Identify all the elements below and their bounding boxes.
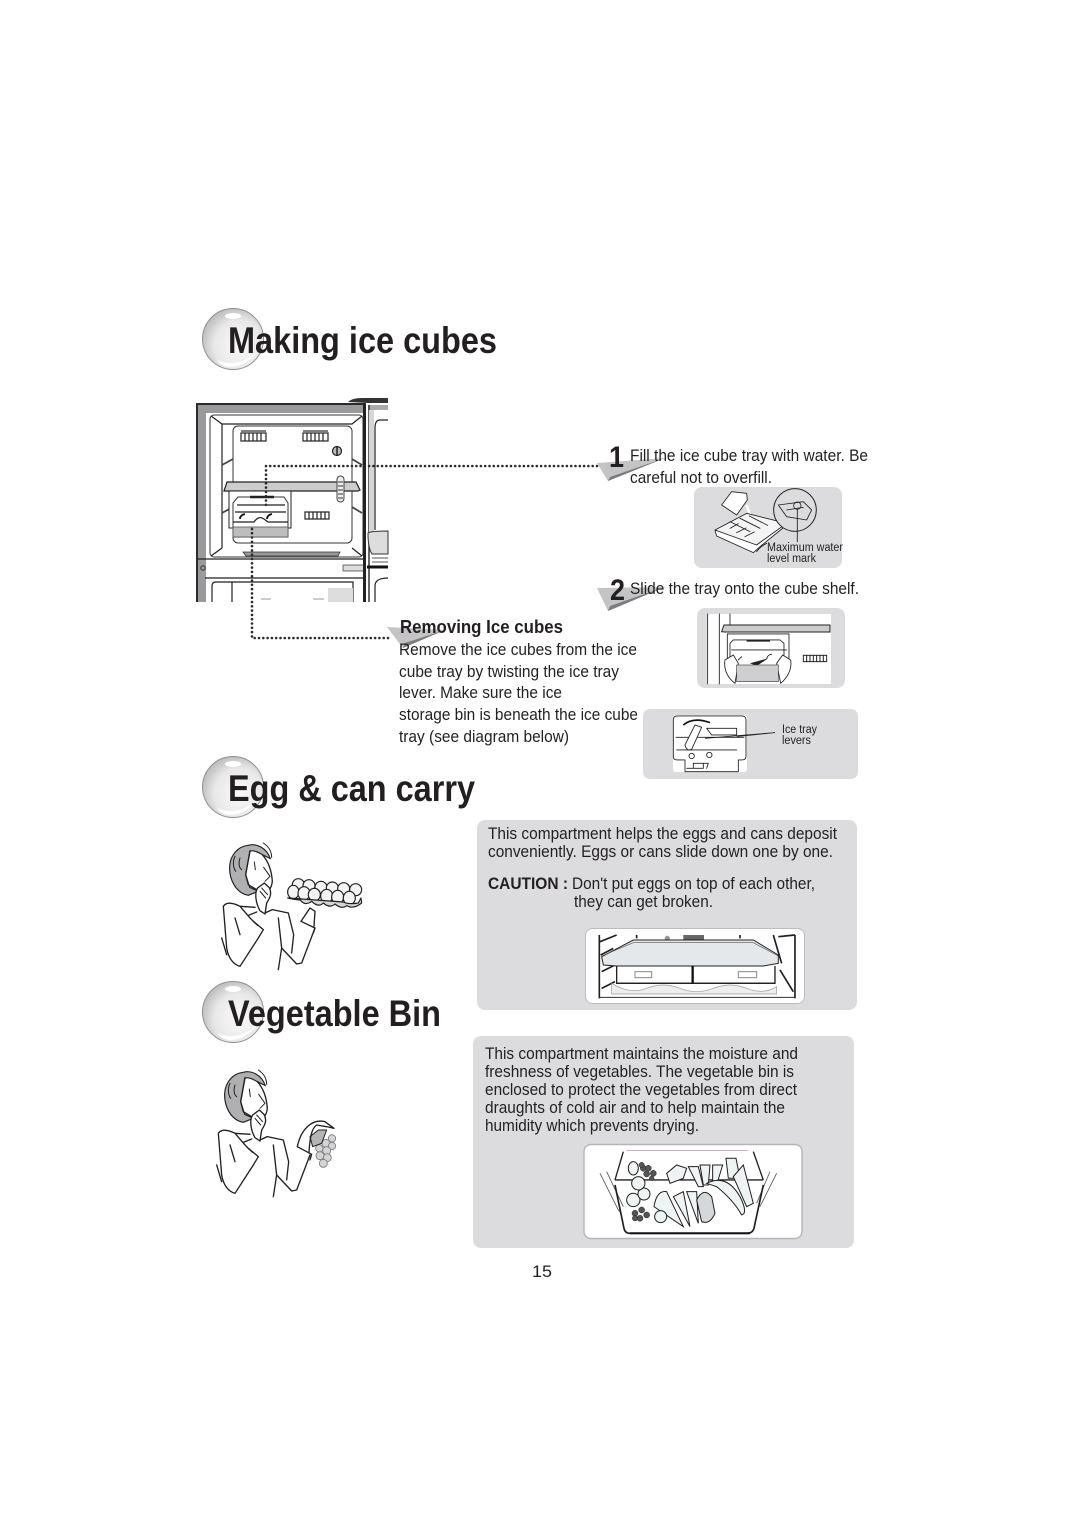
text: caution: [488, 874, 815, 911]
text: caution: Don't put eggs on top of each other,: [572, 874, 815, 893]
title: Vegetable Bin: Vegetable Bin: [228, 993, 441, 1034]
diagram: refrigerator freezer interior: [197, 398, 388, 602]
text: description: This compartment maintains the moisture and: [485, 1044, 798, 1063]
label: maximum water level mark: Maximum water: [767, 542, 843, 554]
panel: egg and can carry: [477, 820, 857, 1010]
title: Egg & can carry: [202, 756, 475, 818]
fridge door: [348, 398, 388, 602]
text: caution: CAUTION :: [488, 874, 568, 893]
marker: step 2: [597, 574, 665, 611]
marker: step 2: 2: [610, 574, 625, 607]
title: Vegetable Bin: [202, 982, 441, 1042]
arrow: dotted leader to step 1: [266, 466, 597, 506]
text: removing instructions: lever. Make sure the ice: [399, 683, 562, 702]
step 1 text: Fill the ice cube tray with water. Be: [630, 446, 868, 465]
illustration: woman holding egg tray: [222, 843, 362, 970]
text: removing instructions: tray (see diagram below): [399, 727, 569, 746]
text: description: draughts of cold air and to help maintain the: [485, 1098, 785, 1117]
marker: removing ice cubes: [387, 627, 445, 648]
text: removing instructions: [399, 640, 638, 746]
marker: step 1: [597, 441, 665, 481]
panel: vegetable bin: [473, 1036, 854, 1248]
label: ice tray levers: Ice tray: [782, 724, 817, 736]
text: description: [485, 1044, 798, 1135]
text: caution: they can get broken.: [574, 892, 713, 911]
text: description: humidity which prevents drying.: [485, 1116, 699, 1135]
text: removing instructions: Remove the ice cubes from the ice: [399, 640, 637, 659]
arrow: dotted leader to removing ice cubes: [252, 527, 388, 638]
text: removing instructions: storage bin is beneath the ice cube: [399, 705, 638, 724]
marker: step 1: 1: [609, 441, 624, 474]
panel: ice tray levers: [643, 709, 858, 779]
text: description: conveniently. Eggs or cans slide down one by one.: [488, 842, 833, 861]
text: description: [488, 824, 837, 861]
label: ice tray levers: levers: [782, 735, 811, 747]
panel: sliding the tray: [697, 608, 845, 688]
panel: filling the tray: [694, 487, 843, 568]
heading: Removing Ice cubes: Removing Ice cubes: [400, 616, 563, 637]
step 2 text: Slide the tray onto the cube shelf.: [630, 579, 859, 598]
text: description: This compartment helps the eggs and cans deposit: [488, 824, 837, 843]
label: maximum water level mark: level mark: [767, 553, 816, 565]
diagram: egg carrier: [586, 928, 804, 1004]
icon: bubble: [202, 756, 264, 818]
step 1 text: careful not to overfill.: [630, 468, 772, 487]
icon: bubble: [202, 308, 264, 370]
label: maximum water level mark: [767, 542, 843, 565]
text: description: freshness of vegetables. The vegetable bin is: [485, 1062, 794, 1081]
page number: 15: [532, 1262, 552, 1281]
illustration: woman holding grapes: [217, 1070, 336, 1197]
icon: bubble: [202, 982, 264, 1042]
title: Egg & can carry: Egg & can carry: [228, 768, 475, 809]
icon: ice tray with jug: [715, 489, 816, 553]
title: Making ice cubes: Making ice cubes: [228, 320, 497, 361]
title: Making ice cubes: [202, 308, 497, 370]
text: removing instructions: cube tray by twisting the ice tray: [399, 662, 619, 681]
label: ice tray levers: [782, 724, 817, 747]
text: description: enclosed to protect the vegetables from direct: [485, 1080, 797, 1099]
step 1 text: [630, 446, 868, 487]
diagram: vegetable bin: [584, 1144, 802, 1238]
